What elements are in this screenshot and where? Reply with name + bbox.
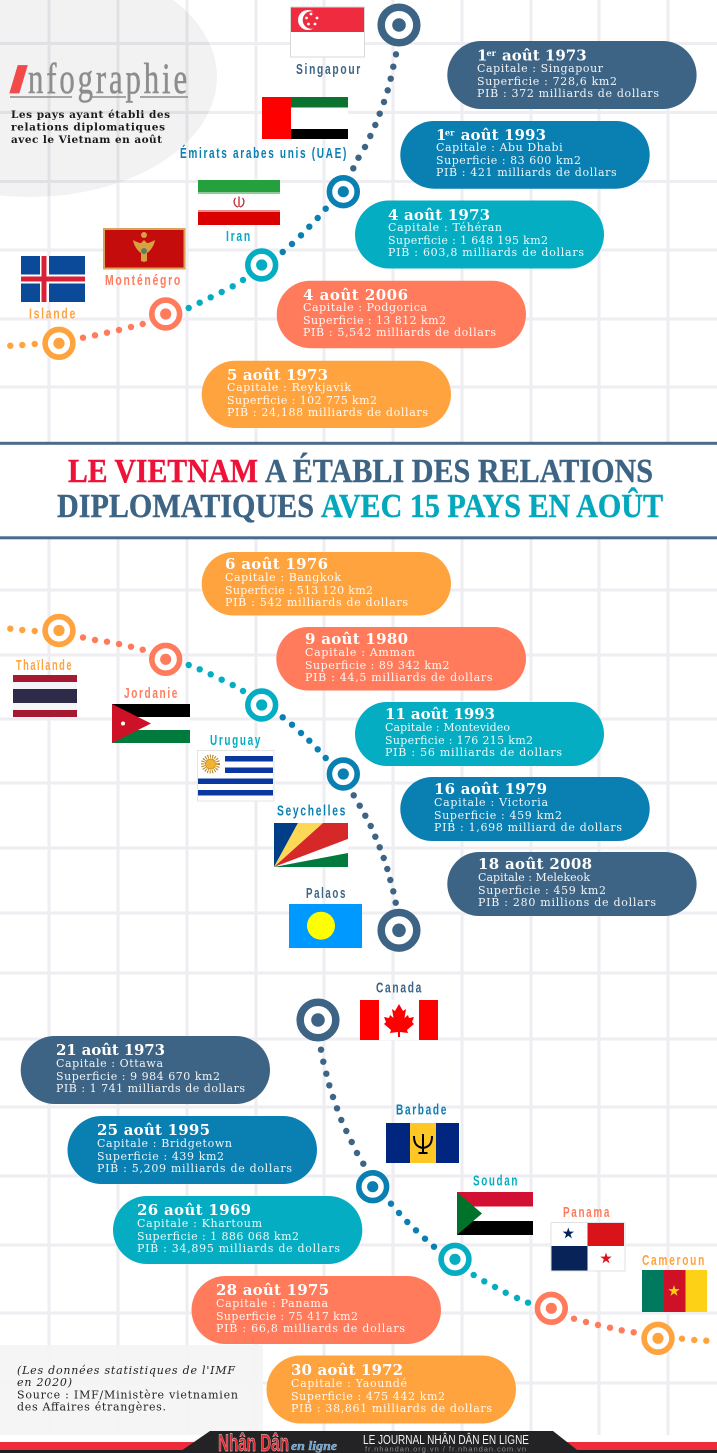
label: Emirats arabes unis: Émirats arabes unis (UAE) <box>180 145 348 162</box>
flag: Palau <box>289 904 362 948</box>
info pill: Soudan: Superficie : 1 886 068 km2 <box>137 1230 299 1243</box>
flag: Singapore <box>290 7 364 57</box>
info pill: Uruguay: Superficie : 176 215 km2 <box>385 734 533 747</box>
info pill: Canada: PIB : 1 741 milliards de dollars <box>56 1082 245 1095</box>
info pill: Iran <box>355 200 604 268</box>
heading: Infographie <box>9 56 190 103</box>
info pill: Palaos <box>447 852 697 916</box>
info pill: Monténégro: Superficie : 13 812 km2 <box>303 314 446 327</box>
info pill: Soudan: Capitale : Khartoum <box>137 1217 263 1230</box>
info pill: Jordanie: PIB : 44,5 milliards de dollars <box>305 671 493 684</box>
info pill: Émirats arabes unis: er <box>445 128 455 138</box>
label: Barbade: Barbade <box>396 1102 448 1119</box>
label: Jordanie: Jordanie <box>124 685 179 702</box>
source panel <box>0 1345 263 1435</box>
flag: Montenegro <box>104 229 184 268</box>
info pill: Panama: Capitale : Panama <box>216 1297 328 1310</box>
source note: Source : IMF/Ministère vietnamien <box>17 1389 238 1402</box>
info pill: Singapour <box>447 41 697 109</box>
info pill: Iran: Superficie : 1 648 195 km2 <box>388 234 548 247</box>
info pill: Iran: PIB : 603,8 milliards de dollars <box>388 246 584 259</box>
info pill: Barbade: 25 août 1995 <box>97 1121 210 1139</box>
info pill: Singapour: er <box>486 48 497 58</box>
flag: Thailand <box>13 675 77 717</box>
title line 2: DIPLOMATIQUES <box>57 488 314 525</box>
info pill: Singapour: août 1973 <box>502 46 587 64</box>
info pill: Canada <box>21 1036 270 1104</box>
footer masthead text <box>363 1432 529 1453</box>
info pill: Canada: 21 août 1973 <box>56 1041 165 1059</box>
info pill: Jordanie: 9 août 1980 <box>305 630 408 648</box>
label: Iran: Iran <box>226 228 252 245</box>
flag: Uruguay <box>198 750 274 801</box>
info pill: Panama: 28 août 1975 <box>216 1281 329 1299</box>
flag: Seychelles <box>274 823 348 867</box>
main title band <box>0 442 717 539</box>
panel: intro blob with infographic heading <box>0 0 217 197</box>
title line 1: LE VIETNAM <box>68 453 258 490</box>
info pill: Thaïlande <box>202 552 451 616</box>
info pill: Islande: PIB : 24,188 milliards de dollars <box>227 406 428 419</box>
flag: Cameroon <box>642 1270 707 1312</box>
info pill: Cameroun <box>266 1356 516 1424</box>
info pill: Seychelles <box>400 777 650 841</box>
info pill: Jordanie: Superficie : 89 342 km2 <box>305 659 450 672</box>
info pill: Cameroun: PIB : 38,861 milliards de dollars <box>291 1402 492 1415</box>
info pill: Palaos: Superficie : 459 km2 <box>478 884 606 897</box>
flag: Sudan <box>457 1192 533 1235</box>
info pill: Barbade: Superficie : 439 km2 <box>97 1150 224 1163</box>
info pill: Émirats arabes unis: Capitale : Abu Dhabi <box>436 141 563 154</box>
info pill: Soudan: 26 août 1969 <box>137 1201 251 1219</box>
flag: Iran <box>198 180 280 225</box>
info pill: Thaïlande: 6 août 1976 <box>225 555 328 573</box>
flag: Barbados <box>386 1123 459 1163</box>
footer masthead text: LE JOURNAL NHÂN DÂN EN LIGNE <box>363 1432 529 1447</box>
info pill: Singapour: Capitale : Singapour <box>477 62 604 75</box>
label: Thaïlande: Thaïlande <box>16 657 73 674</box>
info pill: Seychelles: PIB : 1,698 milliard de dollars <box>434 821 622 834</box>
flag: Panama <box>551 1222 625 1271</box>
flag: Canada <box>360 1000 438 1040</box>
info pill: Thaïlande: PIB : 542 milliards de dollars <box>225 596 408 609</box>
info pill: Singapour: 1 <box>477 46 487 64</box>
timeline path: bottom group <box>300 1002 710 1352</box>
info pill: Uruguay: 11 août 1993 <box>385 705 495 723</box>
info pill: Palaos: PIB : 280 millions de dollars <box>478 896 656 909</box>
label: Palaos: Palaos <box>306 885 347 902</box>
heading: Infographie: nfographie <box>28 56 190 103</box>
info pill: Iran: 4 août 1973 <box>388 206 490 224</box>
info pill: Monténégro <box>277 281 526 348</box>
info pill: Émirats arabes unis: PIB : 421 milliards de dollars <box>436 166 617 179</box>
heading: Infographie: I <box>9 58 27 102</box>
label: Islande: Islande <box>29 306 77 322</box>
info pill: Islande <box>202 361 451 428</box>
info pill: Uruguay <box>355 702 604 766</box>
info pill: Canada: Capitale : Ottawa <box>56 1057 163 1070</box>
timeline path: top group <box>7 7 417 357</box>
info pill: Barbade: Capitale : Bridgetown <box>97 1137 232 1150</box>
info pill: Palaos: 18 août 2008 <box>478 855 592 873</box>
timeline path: middle group <box>7 617 417 948</box>
info pill: Uruguay: Capitale : Montevideo <box>385 721 510 734</box>
intro text: Les pays ayant établi des <box>11 109 170 121</box>
info pill: Monténégro: Capitale : Podgorica <box>303 301 427 314</box>
info pill: Canada: Superficie : 9 984 670 km2 <box>56 1070 220 1083</box>
info pill: Émirats arabes unis: Superficie : 83 600 km2 <box>436 154 581 167</box>
info pill: Iran: Capitale : Téhéran <box>388 221 502 234</box>
info pill: Islande: Capitale : Reykjavik <box>227 381 351 394</box>
label: Canada: Canada <box>376 980 423 997</box>
flag: Jordan <box>112 704 190 743</box>
info pill: Barbade <box>68 1116 317 1184</box>
info pill: Seychelles: Capitale : Victoria <box>434 796 548 809</box>
intro text: avec le Vietnam en août <box>11 134 162 146</box>
title line 1 <box>68 453 653 490</box>
flag: UAE <box>262 97 348 139</box>
info pill: Singapour: Superficie : 728,6 km2 <box>477 75 617 88</box>
info pill: Islande: 5 août 1973 <box>227 366 328 384</box>
info pill: Singapour: PIB : 372 milliards de dollars <box>477 87 659 100</box>
label: Seychelles: Seychelles <box>277 803 347 820</box>
source note: (Les données statistiques de l'IMF <box>17 1364 235 1377</box>
footer banner <box>0 1430 717 1453</box>
source note: des Affaires étrangères. <box>17 1401 166 1414</box>
info pill: Panama: PIB : 66,8 milliards de dollars <box>216 1322 405 1335</box>
info pill: Soudan: PIB : 34,895 milliards de dollars <box>137 1242 340 1255</box>
source note <box>17 1364 238 1414</box>
info pill: Émirats arabes unis <box>400 121 650 189</box>
logo: Nhân Dân en ligne: en ligne <box>291 1438 337 1453</box>
info pill: Thaïlande: Superficie : 513 120 km2 <box>225 584 373 597</box>
info pill: Monténégro: 4 août 2006 <box>303 286 408 304</box>
info pill: Uruguay: PIB : 56 milliards de dollars <box>385 746 562 759</box>
intro text: relations diplomatiques <box>11 122 165 134</box>
source note: en 2020) <box>17 1376 72 1389</box>
info pill: Jordanie <box>276 627 526 690</box>
label: Soudan: Soudan <box>473 1173 519 1190</box>
info pill: Cameroun: 30 août 1972 <box>291 1361 403 1379</box>
info pill: Seychelles: 16 août 1979 <box>434 780 547 798</box>
info pill: Panama: Superficie : 75 417 km2 <box>216 1310 358 1323</box>
flag: Iceland <box>21 256 85 302</box>
info pill: Seychelles: Superficie : 459 km2 <box>434 809 562 822</box>
title line 2: AVEC 15 PAYS EN AOÛT <box>321 487 663 525</box>
title line 2 <box>57 487 663 525</box>
info pill: Monténégro: PIB : 5,542 milliards de dollars <box>303 326 496 339</box>
info pill: Palaos: Capitale : Melekeok <box>478 871 590 884</box>
info pill: Panama <box>192 1276 441 1344</box>
info pill: Émirats arabes unis: 1 <box>436 126 446 144</box>
info pill: Soudan <box>113 1196 362 1264</box>
info pill: Cameroun: Superficie : 475 442 km2 <box>291 1390 445 1403</box>
label: Panama: Panama <box>563 1204 611 1221</box>
label: Uruguay: Uruguay <box>210 732 262 749</box>
info pill: Émirats arabes unis: août 1993 <box>461 126 546 144</box>
info pill: Islande: Superficie : 102 775 km2 <box>227 394 377 407</box>
intro text <box>11 109 170 146</box>
info pill: Barbade: PIB : 5,209 milliards de dollars <box>97 1162 292 1175</box>
info pill: Jordanie: Capitale : Amman <box>305 646 415 659</box>
label: Monténégro: Monténégro <box>105 272 182 289</box>
info pill: Thaïlande: Capitale : Bangkok <box>225 571 341 584</box>
label: Singapour: Singapour <box>296 61 362 78</box>
info pill: Cameroun: Capitale : Yaoundé <box>291 1377 407 1390</box>
title line 1: A ÉTABLI DES RELATIONS <box>265 453 653 490</box>
